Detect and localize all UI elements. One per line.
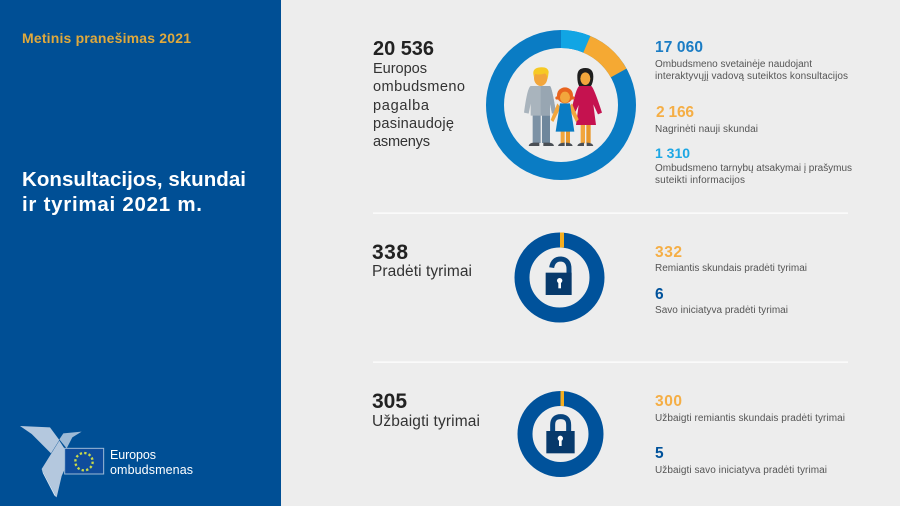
legend: consultations breakdown xyxy=(655,39,852,186)
legend: inquiries closed: Užbaigti remiantis skundais pradėti tyrimai xyxy=(655,413,845,424)
section: inquiries opened: Pradėti tyrimai xyxy=(372,263,472,280)
legend: consultations breakdown: interaktyvųjį vadovą suteiktos konsultacijos xyxy=(655,71,848,82)
section: inquiries closed: 305 xyxy=(372,390,407,413)
legend: consultations breakdown: Nagrinėti nauji skundai xyxy=(655,124,758,135)
section: consultations summary: ombudsmeno xyxy=(373,79,465,95)
legend: consultations breakdown: Ombudsmeno svetainėje naudojant xyxy=(655,59,812,70)
donut chart: inquiries opened xyxy=(522,232,597,315)
section: consultations summary: Europos xyxy=(373,61,427,77)
legend: inquiries opened xyxy=(655,244,807,316)
legend: consultations breakdown: suteikti informacijos xyxy=(655,175,745,186)
title xyxy=(22,168,246,216)
legend: inquiries closed xyxy=(655,393,845,476)
section: inquiries closed: Užbaigti tyrimai xyxy=(372,413,480,430)
report label: Metinis pranešimas 2021 xyxy=(22,30,191,46)
section: consultations summary xyxy=(373,38,465,150)
legend: inquiries closed: 5 xyxy=(655,445,664,462)
icon: closed padlock xyxy=(546,417,575,453)
woman xyxy=(571,68,602,146)
girl xyxy=(551,87,579,146)
legend: inquiries opened: Remiantis skundais pradėti tyrimai xyxy=(655,263,807,274)
legend: consultations breakdown: 1 310 xyxy=(655,145,690,161)
logo: European Ombudsman: Europos xyxy=(110,448,156,462)
legend: consultations breakdown: Ombudsmeno tarnybų atsakymai į prašymus xyxy=(655,163,852,174)
icon: family xyxy=(524,67,602,146)
section: inquiries closed xyxy=(372,390,480,430)
man xyxy=(524,67,556,146)
legend: inquiries opened: 332 xyxy=(655,244,682,261)
title: Konsultacijos, skundai xyxy=(22,168,246,191)
section: consultations summary: 20 536 xyxy=(373,38,434,60)
donut chart: consultations xyxy=(495,39,627,171)
legend: consultations breakdown: 2 166 xyxy=(656,104,694,121)
legend: inquiries opened: 6 xyxy=(655,286,664,303)
section: consultations summary: asmenys xyxy=(373,134,430,150)
panel: left sidebar xyxy=(0,0,281,506)
section: consultations summary: pasinaudoję xyxy=(373,116,454,132)
donut chart: inquiries closed xyxy=(525,391,596,470)
logo: European Ombudsman: ombudsmenas xyxy=(110,463,193,477)
icon: open padlock xyxy=(546,259,572,295)
section: inquiries opened xyxy=(372,241,472,280)
title: ir tyrimai 2021 m. xyxy=(22,193,202,216)
legend: inquiries opened: Savo iniciatyva pradėti tyrimai xyxy=(655,305,788,316)
logo: European Ombudsman xyxy=(20,426,193,497)
legend: consultations breakdown: 17 060 xyxy=(655,39,703,56)
section: inquiries opened: 338 xyxy=(372,241,408,264)
section: consultations summary: pagalba xyxy=(373,98,430,114)
legend: inquiries closed: 300 xyxy=(655,393,682,410)
legend: inquiries closed: Užbaigti savo iniciatyva pradėti tyrimai xyxy=(655,465,827,476)
